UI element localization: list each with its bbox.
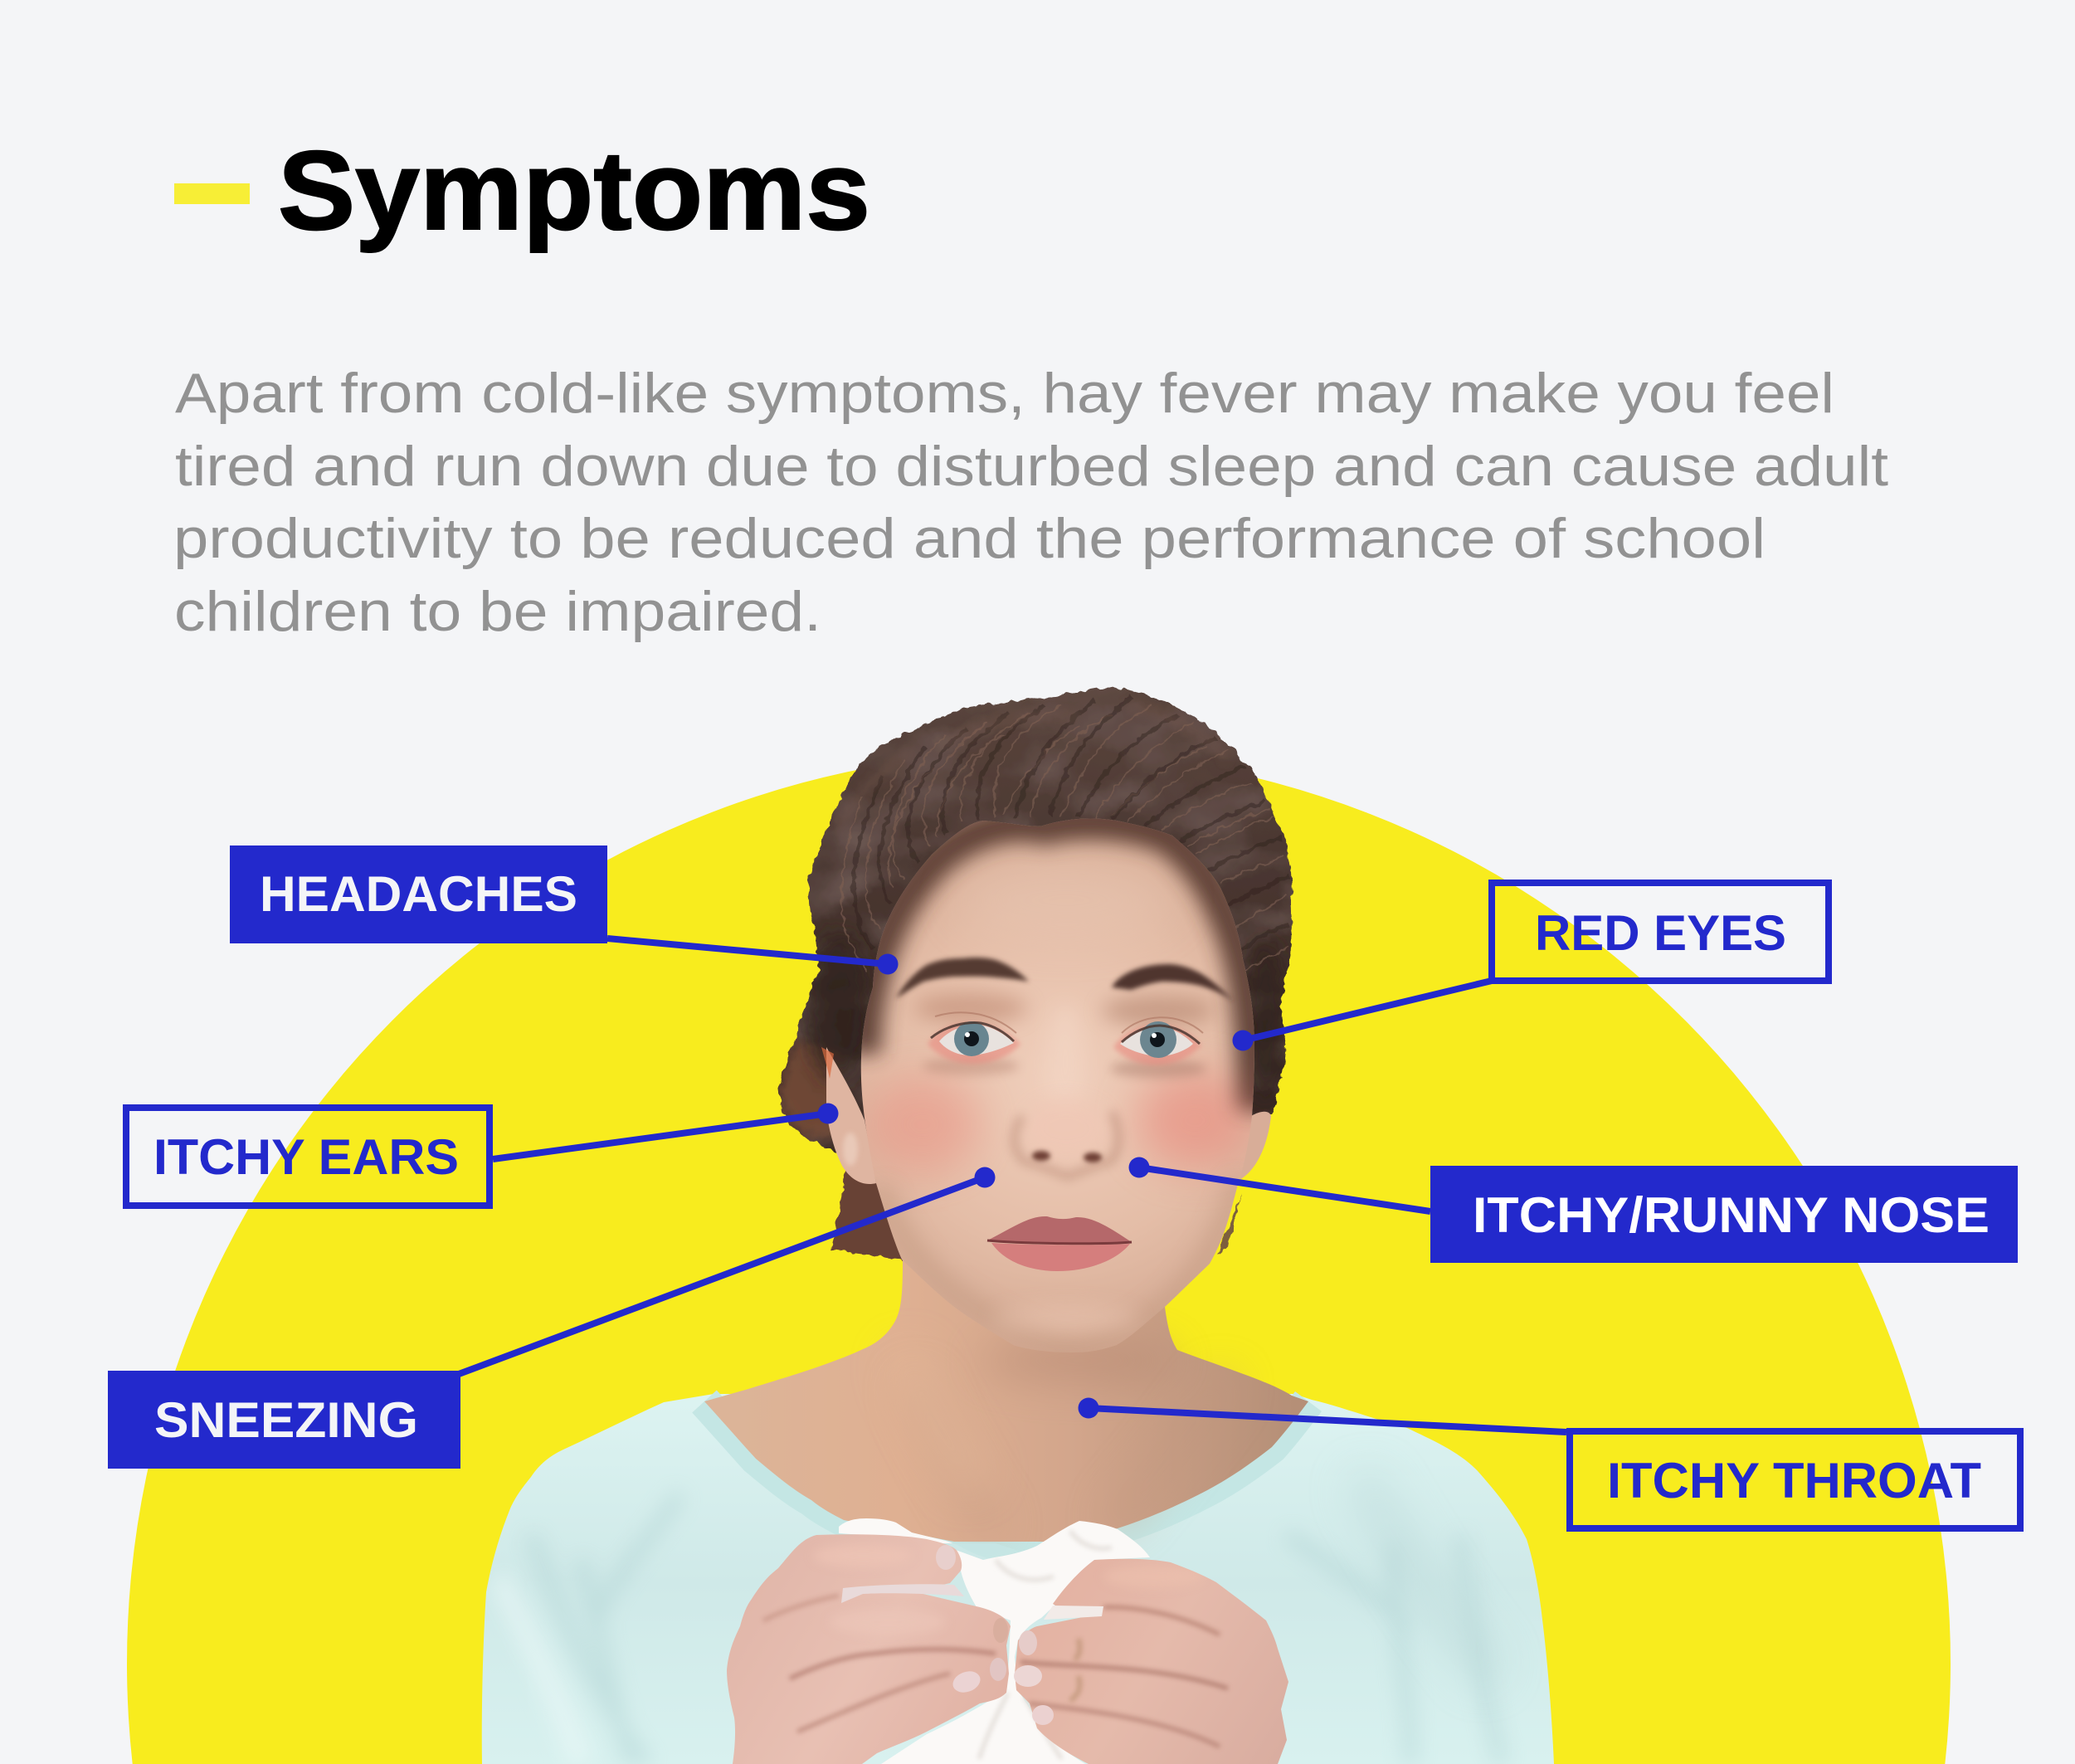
callout: itchy throat: ITCHY THROAT (1607, 1453, 1981, 1508)
intro paragraph: Apart from cold-like symptoms, hay fever may make you feel (175, 362, 1834, 425)
lips (987, 1216, 1132, 1271)
callout: headaches: HEADACHES (260, 866, 577, 922)
callout: sneezing: SNEEZING (154, 1392, 418, 1448)
title: Symptoms (278, 128, 870, 253)
right eye (1113, 1017, 1203, 1065)
callout: red eyes: RED EYES (1535, 905, 1786, 961)
photo: woman with tissue (482, 664, 1554, 1764)
nose (1015, 1004, 1118, 1177)
callout: sneezing (108, 1167, 996, 1469)
hairline shadow (863, 822, 1254, 1112)
jaw shading (879, 1178, 1240, 1348)
left finger gap tissue strip (841, 1584, 964, 1603)
callout: itchy throat (1079, 1397, 2020, 1528)
intro paragraph (173, 362, 1888, 643)
callout: headaches (230, 845, 898, 974)
face (861, 819, 1254, 1352)
hair back mass (778, 687, 1294, 1261)
eye sockets shadow (914, 993, 1215, 1078)
left eyebrow (896, 958, 1029, 998)
right eyebrow (1112, 964, 1234, 1001)
left eye (928, 1012, 1020, 1064)
flushed cheeks (865, 1076, 981, 1172)
callout: red eyes (1233, 883, 1829, 1050)
left hand (727, 1534, 1011, 1764)
right ear (1240, 1112, 1271, 1180)
intro paragraph: children to be impaired. (174, 580, 821, 643)
tissue (839, 1518, 1150, 1764)
title accent bar (174, 183, 250, 204)
left ear (821, 1047, 876, 1184)
callout: itchy ears (126, 1104, 838, 1206)
right finger gap tissue strip (1044, 1606, 1103, 1620)
right hand (1014, 1559, 1288, 1764)
callout: itchy ears: ITCHY EARS (153, 1129, 459, 1185)
neck and collar (704, 1253, 1308, 1545)
shirt (482, 1394, 1554, 1764)
forehead highlight (958, 863, 1174, 938)
callout: itchy runny nose (1128, 1157, 2018, 1263)
intro paragraph: tired and run down due to disturbed sleep and can cause adult (175, 435, 1888, 498)
callout: itchy runny nose: ITCHY/RUNNY NOSE (1473, 1187, 1990, 1243)
yellow semicircle backdrop (127, 752, 1951, 1764)
title block (174, 128, 870, 253)
intro paragraph: productivity to be reduced and the performance of school (173, 507, 1766, 570)
